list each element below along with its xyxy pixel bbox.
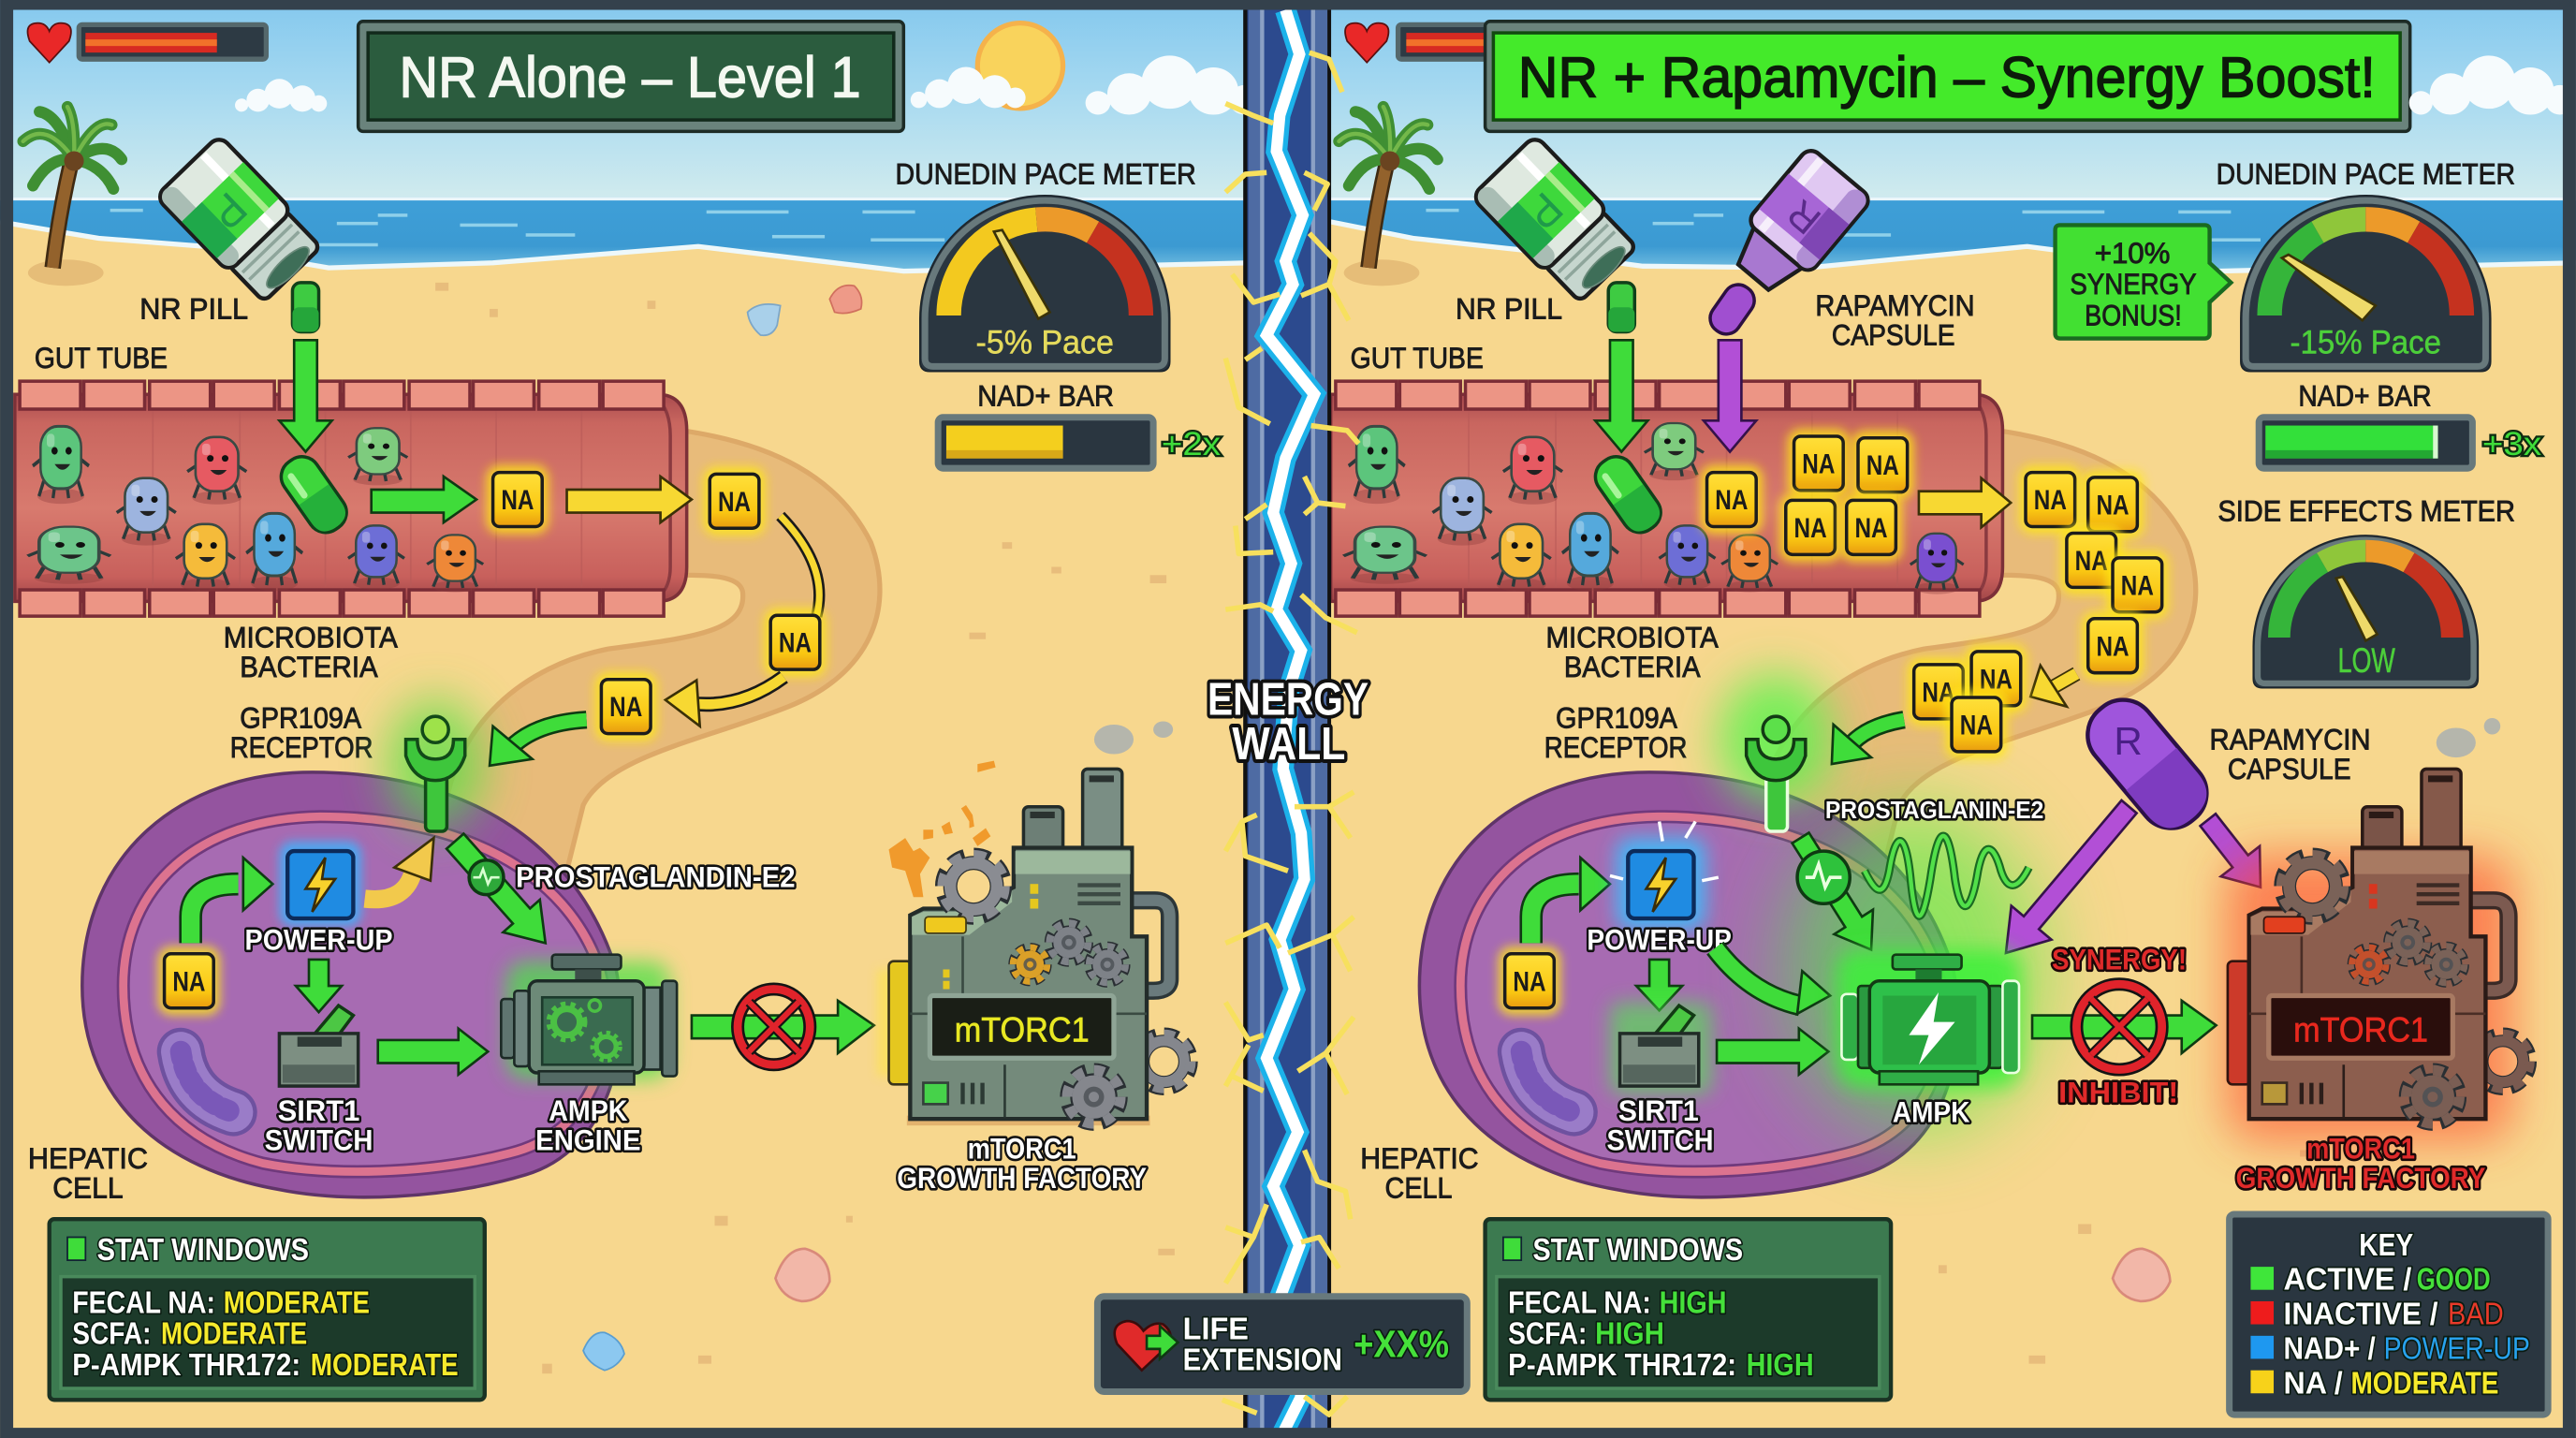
icon: rocks <box>2437 718 2500 757</box>
label: energy wall <box>1208 674 1368 770</box>
icon: sun <box>977 23 1063 109</box>
icon: cloud <box>235 79 327 111</box>
tokens: NA stream: NA <box>2096 490 2130 521</box>
panel: key: KEY <box>2359 1228 2413 1263</box>
icon: power-up <box>279 842 361 927</box>
arrow: rapamycin to AMPK <box>2006 800 2137 953</box>
callout: synergy bonus <box>2056 225 2231 339</box>
label: microbiota: MICROBIOTA <box>1546 620 1719 653</box>
arrow: NA to receptor <box>490 720 587 766</box>
panel: stat windows: P-AMPK THR172: <box>72 1348 300 1383</box>
token: NA in cell: NA <box>172 966 205 997</box>
panel: life extension: +XX% <box>1354 1323 1449 1366</box>
label: AMPK engine <box>535 1093 641 1157</box>
label: receptor: GPR109A <box>240 700 361 734</box>
arrow: power-up to SIRT1 <box>296 960 342 1012</box>
token: NA: NA <box>609 692 642 723</box>
gauge: dunedin pace: -5% Pace <box>976 324 1114 360</box>
panel: key: NA / <box>2284 1366 2343 1401</box>
arrow: yellow to receptor <box>2030 666 2076 707</box>
icon: GPR109A receptor <box>386 698 485 831</box>
panel: key: INACTIVE / <box>2284 1298 2438 1332</box>
label: hepatic cell: CELL <box>52 1170 124 1204</box>
icon: heart with arrow <box>1115 1321 1178 1371</box>
label: NAD+ multiplier: +2x <box>1162 426 1222 462</box>
yellow sparks <box>1222 52 1358 1415</box>
label: rapamycin capsule: RAPAMYCIN <box>2210 722 2371 756</box>
label: SIRT1 switch: SIRT1 <box>278 1093 359 1127</box>
arrow: SIRT1 to AMPK <box>1717 1029 1828 1075</box>
icon: rapamycin bottle: R <box>1778 191 1829 243</box>
icon: shell <box>829 286 862 314</box>
label: mTORC1 factory: GROWTH FACTORY <box>2236 1161 2485 1195</box>
label: receptor: RECEPTOR <box>1544 730 1687 764</box>
tokens: NA cluster: NA <box>1794 513 1827 544</box>
arrow: pill to NA <box>372 477 476 522</box>
icon: signal wave <box>1865 836 2029 916</box>
arrow: rapamycin into gut <box>1704 340 1756 452</box>
label: microbiota: BACTERIA <box>240 650 378 683</box>
label: power-up: POWER-UP <box>245 922 393 956</box>
arrow: NA to power-up <box>1531 858 1610 943</box>
label: AMPK engine: ENGINE <box>535 1123 641 1157</box>
arrow: curved yellow <box>781 516 819 616</box>
icon: inhibit sign <box>2076 984 2162 1070</box>
tokens: NA stream <box>2019 465 2169 681</box>
lightning bolt <box>1266 10 1314 1432</box>
icon: prostaglandin <box>469 860 504 895</box>
sand path <box>1760 431 2196 871</box>
label: mTORC1 factory: GROWTH FACTORY <box>897 1161 1147 1195</box>
icon: palm tree <box>23 107 122 286</box>
label: gut tube: GUT TUBE <box>35 341 168 374</box>
gauge: side effects: LOW <box>2337 641 2395 680</box>
icon: palm tree <box>1339 107 1438 286</box>
panel: stat windows: HIGH <box>1595 1317 1664 1352</box>
health bar <box>1345 23 1497 63</box>
panel: stat windows: SCFA: <box>72 1317 152 1352</box>
icon: cloud <box>2409 55 2575 115</box>
arrow: receptor to AMPK <box>446 834 546 943</box>
label: prostaglandin-E2: PROSTAGLANDIN-E2 <box>516 860 795 894</box>
tokens: NA cluster: NA <box>1854 513 1888 544</box>
label: dunedin meter: DUNEDIN PACE METER <box>2217 157 2515 191</box>
token: NA: NA <box>718 487 751 518</box>
arrow: curved yellow to receptor <box>666 677 783 726</box>
icon: falling NR pill <box>1608 283 1634 332</box>
title <box>1486 22 2410 131</box>
tokens: NA at receptor: NA <box>1980 664 2012 695</box>
panel: key: BAD <box>2448 1298 2504 1332</box>
label: SIRT1 switch <box>265 1093 373 1157</box>
panel: stat windows: HIGH <box>1747 1348 1814 1383</box>
label: energy wall: ENERGY <box>1208 674 1368 725</box>
token: NA: NA <box>501 485 534 516</box>
panel: key: GOOD <box>2417 1263 2491 1298</box>
icon: mTORC1 factory inhibited: mTORC1 <box>2293 1011 2428 1049</box>
label: microbiota: MICROBIOTA <box>224 620 398 653</box>
title: NR Alone – Level 1 <box>400 46 861 110</box>
label: power-up: POWER-UP <box>1587 922 1732 956</box>
tokens: NA cluster: NA <box>1802 448 1835 479</box>
icon: AMPK engine <box>501 955 677 1084</box>
bar: NAD+ <box>2259 418 2472 468</box>
label: mTORC1 factory <box>2236 1131 2485 1195</box>
icon: mitochondrion <box>181 1051 233 1112</box>
icon: cloud <box>1086 55 1260 115</box>
label: energy wall: WALL <box>1232 719 1345 770</box>
label: side effects meter: SIDE EFFECTS METER <box>2217 493 2515 527</box>
panel: NR alone <box>15 22 1260 1400</box>
icon: prostaglandin <box>1797 851 1850 903</box>
panel: stat windows: STAT WINDOWS <box>97 1233 309 1268</box>
token: NA in cell <box>1499 946 1560 1016</box>
icon: SIRT1 switch <box>1610 1003 1712 1094</box>
label: mTORC1 factory: mTORC1 <box>968 1131 1076 1165</box>
icon: NR bottle: P <box>1516 183 1572 239</box>
panel: stat windows <box>1486 1219 1891 1400</box>
icon: shell <box>2113 1249 2170 1301</box>
panel: stat windows: MODERATE <box>311 1348 459 1383</box>
icon: rapamycin capsule <box>2074 686 2220 842</box>
background: sea <box>0 198 2576 279</box>
hepatic cell <box>82 772 621 1197</box>
label: mTORC1 factory: mTORC1 <box>2306 1131 2415 1165</box>
icon: mTORC1 factory inhibited <box>2228 769 2529 1123</box>
arrow: prostaglandin to AMPK <box>1793 832 1873 949</box>
label: mTORC1 factory <box>897 1131 1147 1195</box>
sea ripples <box>110 209 2261 246</box>
panel: key: NAD+ / <box>2284 1331 2376 1366</box>
arrow: NA to receptor <box>1832 720 1904 764</box>
hepatic cell <box>1419 772 1958 1197</box>
panel: key: ACTIVE / <box>2284 1263 2411 1298</box>
icon: GPR109A receptor <box>1747 716 1806 831</box>
panel: energy wall <box>1097 0 1467 1438</box>
label: hepatic cell: CELL <box>1385 1170 1453 1204</box>
panel: stat windows: SCFA: <box>1508 1317 1587 1352</box>
label: NAD+ bar: NAD+ BAR <box>2298 378 2431 412</box>
gauge: dunedin pace: -15% Pace <box>2291 324 2441 360</box>
label: NR pill: NR PILL <box>139 291 248 325</box>
label: SIRT1 switch: SWITCH <box>1606 1123 1714 1157</box>
tokens: NA stream: NA <box>2121 570 2154 601</box>
panel: stat windows: MODERATE <box>161 1317 307 1352</box>
bar: NAD+ <box>938 418 1153 468</box>
arrow: SIRT1 to AMPK <box>378 1029 488 1075</box>
label: hepatic cell: HEPATIC <box>1360 1141 1479 1175</box>
panel: stat windows: FECAL NA: <box>72 1285 215 1320</box>
panel: NR plus rapamycin <box>1331 22 2575 1415</box>
icon: falling rapamycin capsule <box>1705 279 1760 340</box>
arrow: power-up to AMPK <box>1715 948 1830 1014</box>
label: dunedin meter: DUNEDIN PACE METER <box>896 157 1196 191</box>
label: NAD+ multiplier: +3x <box>2482 426 2542 462</box>
icon: sparks <box>889 761 996 897</box>
arrow: inhibited to mTORC1 <box>2032 1001 2217 1053</box>
panel: life extension: LIFE <box>1183 1312 1249 1346</box>
panel: stat windows: MODERATE <box>224 1285 370 1320</box>
label: receptor <box>1544 700 1687 764</box>
token: NA <box>487 465 549 534</box>
token: NA in cell <box>158 946 220 1016</box>
tokens: NA stream: NA <box>2034 485 2067 516</box>
label: microbiota <box>1546 620 1719 683</box>
panel: life extension <box>1097 1297 1467 1392</box>
label: AMPK: AMPK <box>1893 1095 1970 1129</box>
panel: key: MODERATE <box>2351 1366 2498 1401</box>
label: receptor: GPR109A <box>1556 700 1677 734</box>
token: NA: NA <box>779 628 812 659</box>
label: prostaglanin-E2: PROSTAGLANIN-E2 <box>1825 796 2043 824</box>
icon: shell <box>583 1332 624 1371</box>
gauge: dunedin pace <box>920 196 1170 372</box>
label: synergy: SYNERGY! <box>2052 942 2187 976</box>
arrow: inhibited to mTORC1 <box>692 1001 874 1053</box>
arrow: pill into gut <box>279 340 332 452</box>
token: NA in cell: NA <box>1513 966 1546 997</box>
icon: NR bottle <box>155 135 325 306</box>
icon: microbiota bacteria <box>1343 423 1964 594</box>
icon: rocks <box>1094 721 1173 755</box>
icon: signal wave highlight <box>1865 836 2029 916</box>
tokens: NA stream: NA <box>2075 546 2108 577</box>
token: NA <box>703 466 766 536</box>
title: NR + Rapamycin – Synergy Boost! <box>1518 46 2376 110</box>
label: hepatic cell <box>1360 1141 1479 1204</box>
icon: mTORC1 factory <box>877 769 1191 1125</box>
gauge: side effects <box>2253 536 2478 688</box>
label: SIRT1 switch: SIRT1 <box>1618 1093 1699 1127</box>
panel: stat windows: FECAL NA: <box>1508 1285 1651 1320</box>
panel: stat windows: STAT WINDOWS <box>1532 1233 1743 1268</box>
panel: stat windows <box>50 1219 485 1400</box>
icon: microbiota bacteria <box>28 426 483 593</box>
icon: mitochondrion <box>1521 1051 1573 1112</box>
panel: key <box>2230 1214 2548 1415</box>
arrow: NA out of gut <box>567 477 692 522</box>
token: NA <box>764 608 827 677</box>
label: receptor <box>230 700 373 764</box>
label: microbiota <box>224 620 398 683</box>
icon: shell <box>775 1249 829 1301</box>
glow: mTORC1 <box>2226 855 2513 1142</box>
glow: AMPK activation <box>1719 674 2045 1134</box>
label: AMPK engine: AMPK <box>549 1093 628 1127</box>
icon: shell <box>748 304 781 335</box>
label: rapamycin capsule <box>2210 722 2371 785</box>
sand speckles <box>435 283 2310 1373</box>
tokens: NA at receptor: NA <box>1960 710 1993 741</box>
tokens: NA at receptor: NA <box>1922 677 1955 708</box>
label: microbiota: BACTERIA <box>1564 650 1701 683</box>
tokens: NA cluster: NA <box>1866 450 1899 481</box>
panel: stat windows: P-AMPK THR172: <box>1508 1348 1736 1383</box>
arrow: NA to power-up <box>191 858 272 943</box>
token: NA <box>594 672 657 741</box>
tokens: NA cluster: NA <box>1715 485 1748 516</box>
arrow: NR into gut <box>1595 340 1647 452</box>
panel: stat windows: HIGH <box>1660 1285 1727 1320</box>
callout: synergy bonus: BONUS! <box>2085 298 2182 331</box>
label: rapamycin capsule: RAPAMYCIN <box>1815 288 1975 322</box>
icon: NR bottle <box>1471 135 1641 306</box>
callout: synergy bonus: SYNERGY <box>2070 267 2197 301</box>
icon: SIRT1 switch <box>279 1005 359 1086</box>
label: SIRT1 switch: SWITCH <box>265 1123 373 1157</box>
callout: synergy bonus: +10% <box>2095 236 2170 270</box>
sand path <box>444 431 880 871</box>
label: hepatic cell <box>28 1141 148 1204</box>
icon: rapamycin capsule: R <box>2114 719 2143 763</box>
icon: NR pill in gut <box>1588 449 1668 539</box>
background: sky <box>0 0 2576 205</box>
tokens: NA at receptor <box>1908 644 2027 759</box>
label: rapamycin capsule: CAPSULE <box>1832 318 1955 352</box>
label: inhibit: INHIBIT! <box>2058 1076 2178 1109</box>
health bar <box>27 23 266 63</box>
title <box>359 22 903 131</box>
icon: power-up <box>1610 822 1719 930</box>
icon: rapamycin bottle <box>1722 146 1872 303</box>
panel: key: POWER-UP <box>2384 1331 2530 1366</box>
icon: AMPK activated <box>1837 949 2021 1088</box>
gut tube <box>15 381 687 616</box>
panel: life extension: EXTENSION <box>1183 1343 1342 1378</box>
label: NR pill: NR PILL <box>1456 291 1562 325</box>
tokens: NA cluster <box>1701 429 1914 562</box>
arrow: rapamycin to mTORC1 <box>2201 814 2261 888</box>
label: rapamycin capsule <box>1815 288 1975 352</box>
arrow: NA out of gut <box>1919 478 2011 527</box>
icon: NR bottle: P <box>200 183 256 239</box>
icon: falling NR pill <box>292 283 319 332</box>
icon: NR pill in gut <box>274 449 354 539</box>
icon: cloud <box>911 67 1026 108</box>
gut tube <box>1331 381 2002 616</box>
arrow: power-up to receptor <box>365 838 433 900</box>
label: gut tube: GUT TUBE <box>1351 341 1484 374</box>
label: NAD+ bar: NAD+ BAR <box>977 378 1114 412</box>
label: hepatic cell: HEPATIC <box>28 1141 148 1175</box>
label: receptor: RECEPTOR <box>230 730 373 764</box>
arrow: power-up to SIRT1 <box>1636 960 1682 1010</box>
tokens: NA stream: NA <box>2096 631 2130 662</box>
label: rapamycin capsule: CAPSULE <box>2228 752 2351 785</box>
icon: mTORC1 factory: mTORC1 <box>955 1011 1090 1049</box>
icon: inhibit sign <box>738 990 810 1064</box>
gauge: dunedin pace <box>2241 196 2491 372</box>
label: SIRT1 switch <box>1606 1093 1714 1157</box>
